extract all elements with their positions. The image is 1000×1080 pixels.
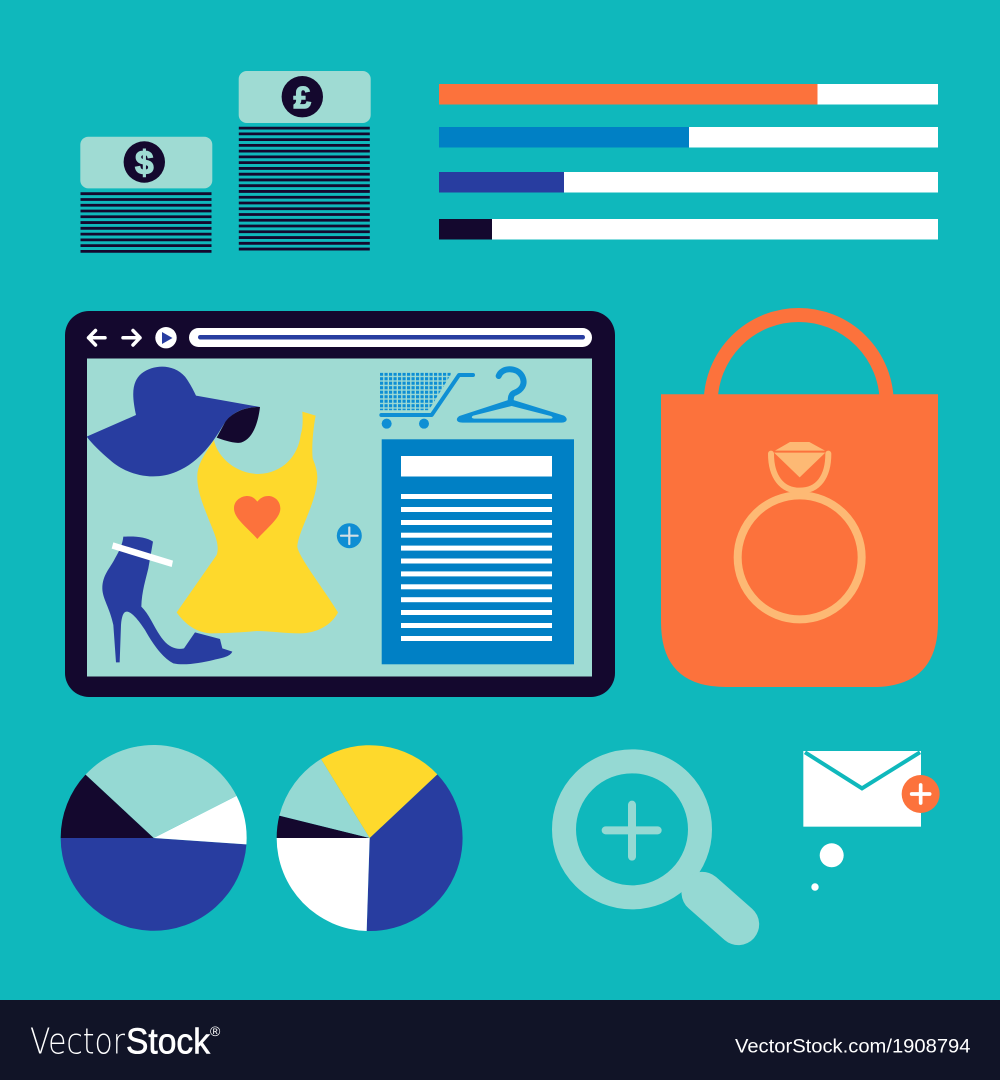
- icon: orange shopping bag: [661, 315, 938, 687]
- icon: yellow dress with heart: [177, 412, 338, 633]
- heading bar: [401, 456, 552, 476]
- icon: back arrow: [88, 330, 105, 345]
- money stack: dollar: [80, 137, 212, 253]
- brand logo: [30, 1020, 221, 1062]
- brand logo: Stock: [126, 1020, 211, 1061]
- brand logo: ®: [210, 1023, 221, 1039]
- money stack: pound: [239, 71, 371, 250]
- icon: shopping cart: [380, 373, 473, 429]
- thought bubbles: [811, 843, 844, 891]
- icon: forward arrow: [123, 330, 140, 345]
- icon: sun hat: [87, 367, 260, 476]
- pie chart: left: [61, 745, 247, 931]
- icon: play button: [155, 327, 177, 348]
- icon: high heel shoe: [102, 536, 232, 664]
- panel: browser window: [65, 311, 615, 697]
- image id: VectorStock.com/1908794: [735, 1037, 971, 1058]
- brand logo: Vector: [30, 1021, 125, 1062]
- text lines: [401, 494, 552, 641]
- icon: plus button: [337, 523, 362, 548]
- progress bars: [439, 84, 938, 240]
- icon: diamond ring: [738, 442, 862, 619]
- panel: product description: [382, 439, 574, 664]
- icon: envelope with plus badge: [803, 751, 940, 827]
- money stack: pound: £: [294, 80, 311, 115]
- icon: magnifying glass: [564, 761, 738, 924]
- pie chart: right: [277, 745, 463, 931]
- footer bar: [0, 1000, 1000, 1080]
- address bar: [189, 328, 592, 347]
- icon: clothes hanger: [457, 369, 567, 423]
- money stack: dollar: $: [135, 144, 153, 181]
